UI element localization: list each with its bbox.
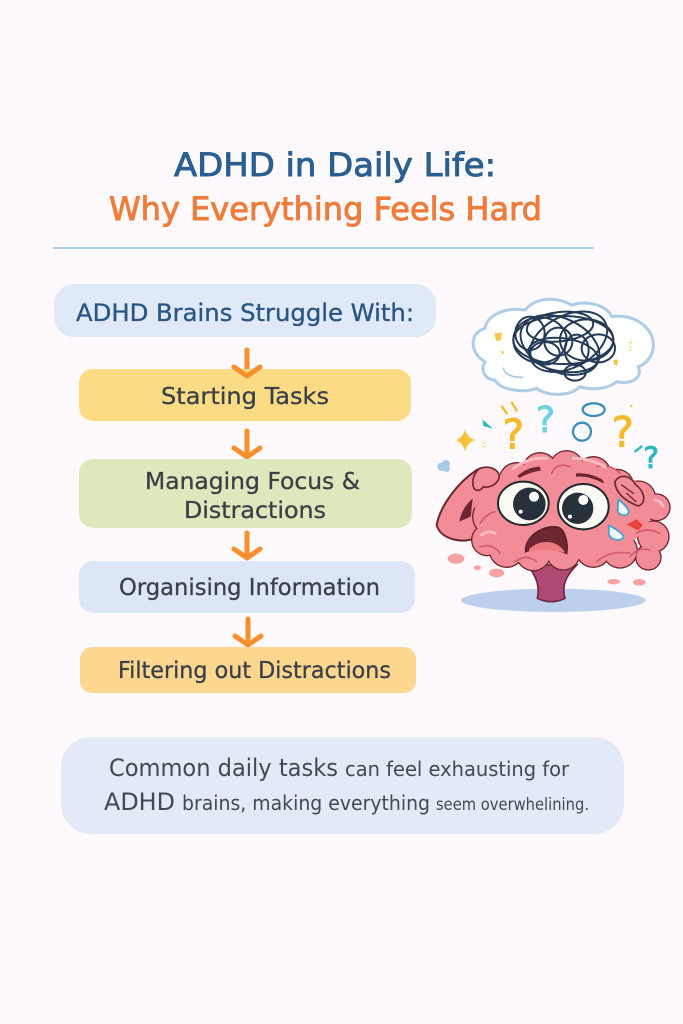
panel: header pill — [54, 284, 436, 337]
panel: starting tasks: Starting Tasks — [161, 384, 329, 410]
arrow 3 — [234, 533, 260, 558]
ground shadow — [461, 589, 646, 612]
panel: closing note: Common daily tasks — [109, 754, 338, 782]
pink dots — [448, 554, 646, 586]
panel: starting tasks — [79, 367, 411, 421]
left arm — [437, 468, 499, 541]
question marks and sparkles — [437, 400, 659, 475]
panel: managing focus and distractions: Distractions — [184, 498, 326, 524]
eyes — [498, 482, 609, 529]
brain body fill — [472, 451, 669, 570]
panel: closing note: seem overwhelining. — [436, 795, 589, 815]
arrow 2 — [234, 431, 260, 457]
mouth — [526, 527, 567, 553]
panel: closing note: can feel exhausting for — [345, 757, 570, 781]
question marks and sparkles: ? — [503, 411, 524, 459]
panel: organising information — [79, 561, 415, 613]
arrow 4 — [235, 619, 261, 645]
blush mark — [627, 519, 643, 531]
title — [109, 146, 542, 228]
panel: managing focus and distractions — [79, 459, 412, 528]
scribble tangle — [511, 299, 617, 387]
illustration: stressed brain — [437, 299, 671, 612]
panel: closing note: brains, making everything — [182, 791, 430, 815]
title: Why Everything Feels Hard — [109, 190, 542, 228]
brain body outline — [471, 450, 671, 571]
left hand — [473, 467, 499, 490]
arrow 1 — [234, 350, 260, 376]
question marks and sparkles: ? — [612, 408, 634, 457]
panel: managing focus and distractions: Managing Focus & — [145, 469, 360, 495]
panel: filtering out distractions: Filtering out Distractions — [118, 658, 391, 684]
eyebrows — [517, 467, 541, 478]
panel: organising information: Organising Information — [119, 575, 380, 601]
question marks and sparkles: ? — [643, 441, 659, 475]
panel: closing note: ADHD — [104, 788, 175, 816]
brain folds and highlights — [480, 458, 663, 562]
thought bubble — [473, 299, 653, 394]
panel: header pill: ADHD Brains Struggle With: — [76, 299, 414, 327]
right hand — [615, 476, 644, 506]
panel: closing note — [61, 737, 624, 834]
panel: filtering out distractions — [80, 647, 416, 693]
tears — [609, 499, 629, 540]
question marks and sparkles: ? — [536, 400, 555, 441]
brain stem — [527, 565, 577, 602]
title: ADHD in Daily Life: — [174, 146, 496, 184]
arm gap shadow — [459, 498, 473, 522]
